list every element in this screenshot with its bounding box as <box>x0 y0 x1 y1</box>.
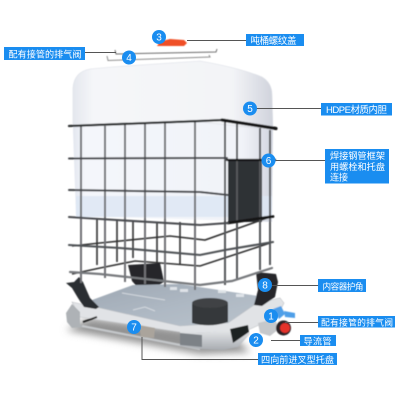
right corner guard <box>254 272 278 306</box>
number badge 5 <box>243 102 257 116</box>
pallet rim and feet <box>72 298 284 333</box>
label: welded steel frame: 焊接钢管框架 <box>330 150 385 161</box>
number badge 2 <box>249 333 263 347</box>
number badge 4 <box>122 50 136 64</box>
number badge 4: 4 <box>126 53 132 64</box>
label: corner protector <box>318 279 366 292</box>
number badge 8: 8 <box>262 280 268 292</box>
vent pipes <box>107 49 217 60</box>
number badge 6: 6 <box>266 156 272 167</box>
number badge 2: 2 <box>253 336 259 346</box>
label: HDPE liner: HDPE材质内胆 <box>326 104 387 116</box>
black side panel <box>228 160 262 222</box>
label: screw cap: 吨桶螺纹盖 <box>250 35 297 47</box>
leader lines <box>85 40 325 360</box>
label: drain pipe: 导流管 <box>304 336 332 346</box>
drain pipe body <box>258 319 279 336</box>
frame rails <box>69 120 276 285</box>
label: vent valve top: 配有接管的排气阀 <box>8 48 82 60</box>
back frame <box>72 217 270 274</box>
label: vent valve top <box>4 47 85 60</box>
label: vent valve bottom: 配有接管的排气阀 <box>321 316 393 328</box>
number badge 8 <box>258 278 272 292</box>
left corner guard <box>66 277 99 309</box>
cap <box>157 39 187 46</box>
label: welded steel frame: 连接 <box>330 172 348 182</box>
valve knob <box>276 320 291 336</box>
pallet surface <box>92 284 265 326</box>
front frame silver verticals <box>81 122 270 290</box>
drain valve: blue fittings <box>273 306 295 319</box>
label: pallet: 四向前进叉型托盘 <box>261 354 334 365</box>
floor shadow <box>66 318 250 354</box>
number badge 1: 1 <box>268 312 274 322</box>
label: screw cap <box>246 34 304 47</box>
number badge 6 <box>262 154 276 168</box>
inner tank <box>73 61 273 222</box>
label: drain pipe <box>300 335 336 346</box>
number badge 3: 3 <box>156 32 162 44</box>
number badge 1 <box>264 309 278 323</box>
product: IBC tote <box>66 39 295 350</box>
label: welded steel frame <box>325 149 389 184</box>
number badge 7: 7 <box>131 322 137 334</box>
label: welded steel frame: 用螺栓和托盘 <box>330 161 385 172</box>
back corner guard <box>128 263 164 290</box>
number badge 3 <box>152 30 166 44</box>
number badge 7 <box>127 320 141 334</box>
front barrel guard <box>192 298 228 325</box>
label: corner protector: 内容器护角 <box>322 280 364 292</box>
number badge 5: 5 <box>247 104 253 115</box>
